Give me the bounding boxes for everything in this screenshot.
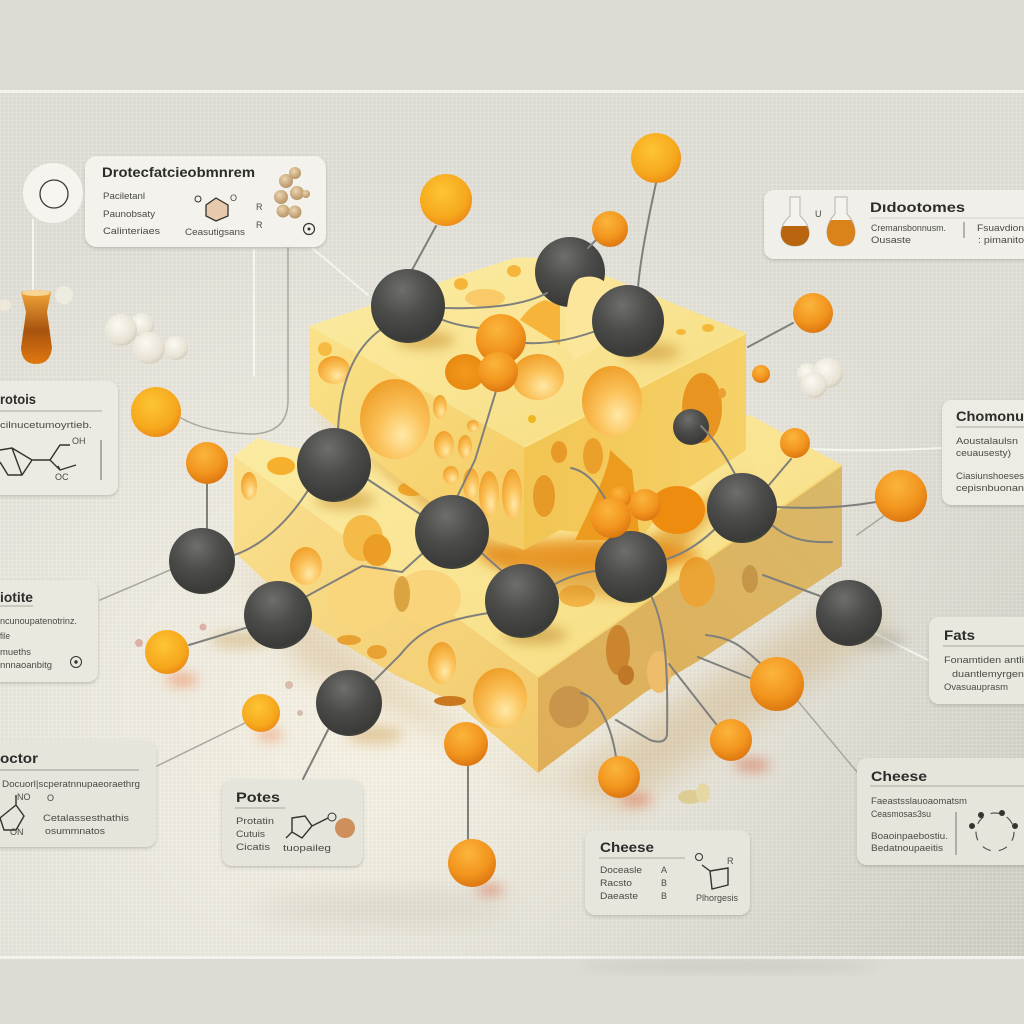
panel: proteins <box>0 381 118 495</box>
labels: B <box>661 878 667 888</box>
molecule diagram: Plhorgesis <box>696 893 738 903</box>
description <box>944 655 1024 692</box>
molecule diagram: ON <box>10 827 24 837</box>
molecule diagram: OC <box>55 472 69 482</box>
soft contact shadows <box>166 331 905 895</box>
panel: doctor: Cetalassesthathis <box>43 813 130 823</box>
description: Ciasiunshoeses <box>956 471 1024 481</box>
description: Bedatnoupaeitis <box>871 843 944 853</box>
description <box>871 796 967 853</box>
heading: Dıdootomes <box>870 199 965 215</box>
icon: flask right <box>827 197 855 246</box>
labels: Cutuis <box>236 829 266 839</box>
icon: amber beaker <box>0 286 73 364</box>
panel: doctor: O <box>47 793 54 803</box>
labels: Ceasutigsans <box>185 227 246 237</box>
small circle icon <box>304 224 314 234</box>
description: Faeastsslauoaomatsm <box>871 796 967 806</box>
labels: Paunobsaty <box>103 209 156 219</box>
description: Ceasmosas3su <box>871 809 931 819</box>
heading: Cheese <box>600 839 654 855</box>
upper block holes <box>318 265 726 540</box>
panel: top right flasks callout: U <box>815 209 822 219</box>
heading: rotois <box>0 391 36 407</box>
cheese: lower block <box>234 415 842 773</box>
molecule ring diagram <box>969 810 1018 851</box>
icon: white balls, right <box>797 358 843 398</box>
labels: tuopaileg <box>283 843 331 853</box>
labels <box>236 816 331 853</box>
heading: Chomonu <box>956 408 1024 424</box>
shadow of upper block on lower block <box>309 410 750 600</box>
panel: doctor: osummnatos <box>45 826 106 836</box>
molecule diagram <box>0 436 86 482</box>
cheese: upper block <box>309 258 746 571</box>
description: mueths <box>0 647 32 657</box>
description: cilnucetumoyrtieb. <box>0 420 92 430</box>
labels: Paciletanl <box>103 191 145 201</box>
labels: Racsto <box>600 878 632 888</box>
description: Boaoinpaebostiu. <box>871 831 948 841</box>
heading: Drotecfatcieobmnrem <box>102 164 255 180</box>
description: Aoustalaulsn <box>956 436 1018 446</box>
description: ncunoupatenotrinz. <box>0 616 77 626</box>
cheese: top tab <box>566 276 612 360</box>
description: ceuausesty) <box>956 448 1011 458</box>
panel: top right flasks callout <box>764 190 1024 259</box>
labels: Cicatis <box>236 842 271 852</box>
description <box>0 616 77 670</box>
description: Docuorl|scperatnnupaeoraethrg <box>2 779 140 789</box>
molecule diagram: NO <box>17 792 30 802</box>
labels: Calinteriaes <box>103 226 161 236</box>
molecule diagram <box>286 813 355 838</box>
heading: Potes <box>236 789 280 805</box>
panel: top left proteins callout <box>85 156 326 247</box>
heading: iotite <box>0 589 33 605</box>
description <box>956 436 1024 493</box>
dark sphere behind the cheese tab <box>535 237 605 307</box>
dark atom inside hole <box>673 409 709 445</box>
icon: beige cluster <box>274 167 310 218</box>
labels: R <box>256 220 263 230</box>
molecule diagram: OH <box>72 436 86 446</box>
small circle icon <box>70 656 82 668</box>
labels: Doceasle <box>600 865 642 875</box>
description: Ousaste <box>871 235 911 245</box>
description: cepisnbuonan <box>956 483 1024 493</box>
molecule diagram <box>0 792 30 837</box>
atoms: orange spheres <box>131 133 927 887</box>
panel: cheese right <box>857 758 1024 865</box>
molecule icon <box>195 193 237 221</box>
atoms: dark spheres <box>169 269 882 736</box>
heading: octor <box>0 750 39 766</box>
panel: doctor <box>0 741 156 847</box>
icon: flask left <box>781 197 809 246</box>
bonds and wires <box>189 183 876 840</box>
panel: fats <box>929 617 1024 704</box>
connector lines to callout panels <box>33 220 941 772</box>
description: nnnaoanbitg <box>0 660 52 670</box>
molecule diagram <box>696 854 738 903</box>
description: Fonamtiden antli <box>944 655 1024 665</box>
labels <box>103 191 263 237</box>
description <box>871 223 1024 245</box>
panel: cheese bottom centre <box>585 830 750 915</box>
icon: circle badge <box>23 163 83 223</box>
labels: Daeaste <box>600 891 638 901</box>
labels: R <box>256 202 263 212</box>
icon: small beige crumbs <box>678 783 710 804</box>
description: file <box>0 631 10 641</box>
labels: A <box>661 865 667 875</box>
panel: potes <box>222 780 363 866</box>
panel: chromonic <box>942 400 1024 505</box>
molecule diagram: R <box>727 856 734 866</box>
lower block holes <box>241 457 758 728</box>
labels <box>600 865 667 901</box>
description: : pimanito <box>978 235 1024 245</box>
icon: small crumbs near orange atom <box>135 624 303 716</box>
panel: biotin <box>0 580 98 682</box>
heading: Fats <box>944 627 975 643</box>
heading: Cheese <box>871 768 927 784</box>
description: Fsuavdion <box>977 223 1024 233</box>
description: Ovasuauprasm <box>944 682 1008 692</box>
molecule icon: O <box>230 193 237 203</box>
description: duantlemyrgen <box>952 669 1024 679</box>
cast shadow under the cheese <box>240 560 890 810</box>
icon: white balls, left <box>105 313 188 364</box>
description: Cremansbonnusm. <box>871 223 946 233</box>
labels: B <box>661 891 667 901</box>
labels: Protatin <box>236 816 274 826</box>
